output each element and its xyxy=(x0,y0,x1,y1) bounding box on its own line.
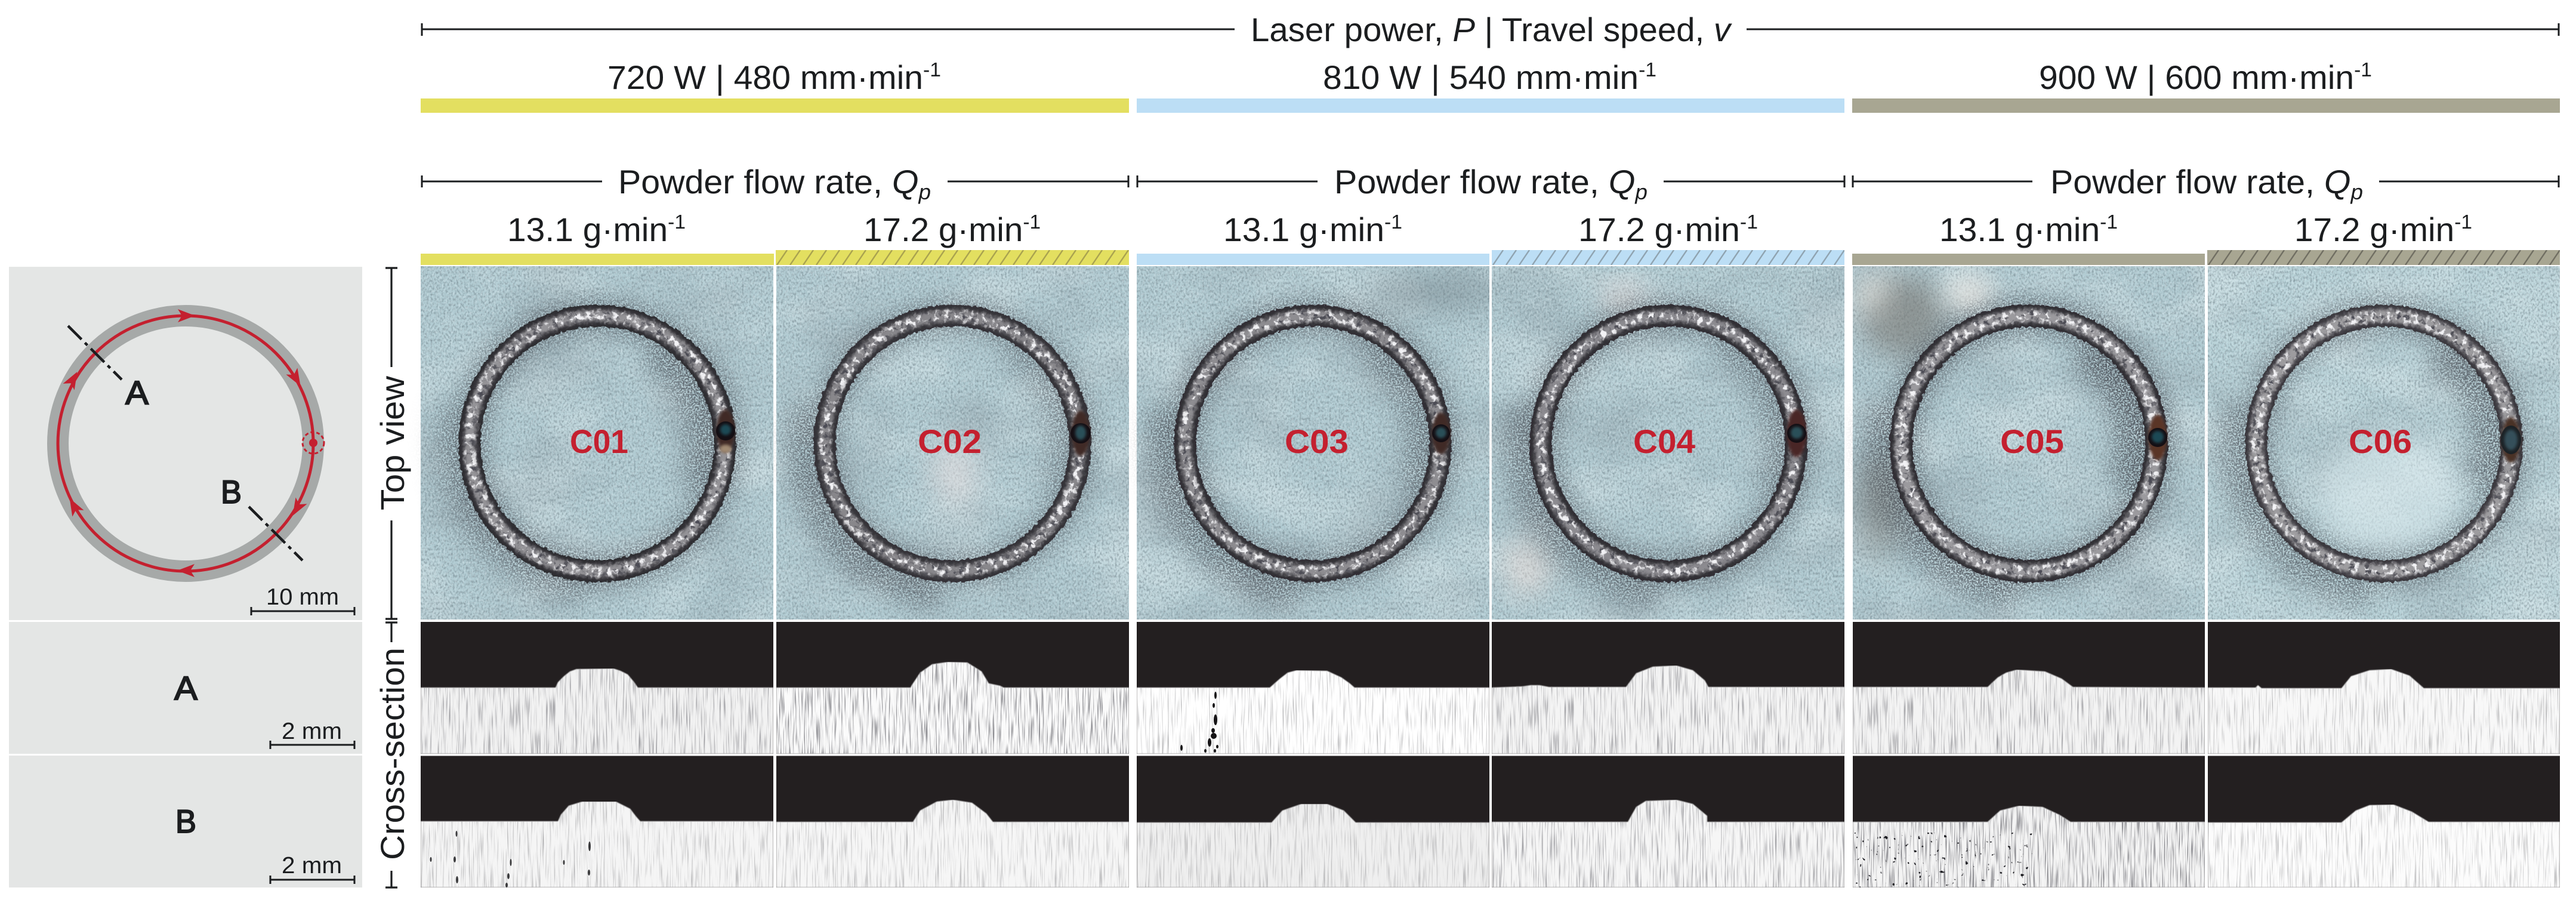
column header C01 xyxy=(421,211,774,265)
group heading: 720 W: -1 xyxy=(923,58,941,81)
powder flow bracket 1: p xyxy=(918,180,931,204)
cross-section B C04 xyxy=(1492,756,1844,887)
group heading: 900 W xyxy=(1852,58,2560,113)
pits xyxy=(1180,692,1218,753)
pits xyxy=(1855,833,2034,887)
bead ring xyxy=(58,316,313,571)
soot xyxy=(1875,316,2157,597)
header bracket: laser power and travel speed xyxy=(422,11,2559,48)
sample label: C03 xyxy=(1285,423,1349,460)
cross-section A C04 xyxy=(1492,622,1844,754)
powder flow bracket 3 xyxy=(1853,163,2559,204)
scale bar 2 mm xyxy=(270,853,354,884)
scale bar 10 mm xyxy=(251,584,354,615)
column header C01: 13.1 g·min xyxy=(507,211,665,248)
dark smudge xyxy=(1366,275,1498,310)
scale bar 2 mm: 2 mm xyxy=(282,853,342,879)
soot xyxy=(798,316,1080,597)
cross-section A C01 xyxy=(421,622,773,754)
overlap stud xyxy=(1432,412,1450,454)
sample label: C05 xyxy=(2000,423,2064,460)
overlap stud xyxy=(1070,411,1091,456)
pits xyxy=(430,831,591,887)
vertical axis: top view: Top view xyxy=(374,375,411,510)
column header C02: -1 xyxy=(1023,211,1041,233)
panel: C02 top view xyxy=(776,266,1129,620)
weld ring xyxy=(2256,316,2512,571)
panel: section A xyxy=(9,622,362,754)
group heading: 810 W: 810 W | 540 mm·min xyxy=(1323,58,1633,96)
cross-section B C06 xyxy=(2208,756,2560,887)
powder flow bracket 2: p xyxy=(1634,180,1648,204)
weld ring xyxy=(470,316,725,571)
heading B: B xyxy=(175,803,196,840)
overlap stud xyxy=(2501,417,2521,463)
discolouration patches xyxy=(1856,275,1993,561)
pale patches xyxy=(1504,286,1644,597)
weld ring xyxy=(1185,316,1440,571)
powder flow bracket 2: Powder flow rate, Q xyxy=(1334,163,1634,201)
column header C03: 13.1 g·min xyxy=(1223,211,1381,248)
weld ring xyxy=(1901,316,2157,571)
vertical axis: top view xyxy=(374,268,411,619)
column header C05: -1 xyxy=(2100,211,2118,233)
column header C02: 17.2 g·min xyxy=(863,211,1022,248)
scale bar 10 mm: 10 mm xyxy=(266,584,339,610)
group heading: 810 W xyxy=(1137,58,1844,113)
group heading: 900 W: 900 W | 600 mm·min xyxy=(2039,58,2349,96)
pale patch xyxy=(931,439,979,504)
laser path xyxy=(58,316,313,571)
cross-section B C02 xyxy=(776,756,1129,887)
overlap stud xyxy=(1787,409,1806,457)
cross-section A C05 xyxy=(1853,622,2205,754)
cross-section A C03 xyxy=(1137,622,1489,754)
powder flow bracket 3: p xyxy=(2350,180,2363,204)
panel: path schematic xyxy=(9,267,362,620)
powder flow bracket 3: Powder flow rate, Q xyxy=(2050,163,2350,201)
column header C04: -1 xyxy=(1740,211,1758,233)
cross-section B C03 xyxy=(1137,756,1489,887)
label B: B xyxy=(221,473,242,510)
panel: C03 top view xyxy=(1137,266,1498,620)
group heading: 720 W: 720 W | 480 mm·min xyxy=(607,58,917,96)
vertical axis: cross-section: Cross-section xyxy=(374,648,411,860)
panel: C04 top view xyxy=(1492,266,1844,620)
overlap stud xyxy=(2148,415,2167,460)
cross-section B C01 xyxy=(421,756,773,887)
panel: section B xyxy=(9,756,362,887)
cross-section A C02 xyxy=(776,622,1129,754)
group heading: 720 W xyxy=(421,58,1129,113)
overlap stud xyxy=(716,409,735,453)
group heading: 810 W: -1 xyxy=(1639,58,1656,81)
path arrows xyxy=(63,309,307,577)
powder flow bracket 2 xyxy=(1137,163,1844,204)
soot xyxy=(443,316,725,597)
panel: C06 top view xyxy=(2208,266,2560,620)
sample label: C06 xyxy=(2349,423,2412,460)
heading A: A xyxy=(174,669,198,707)
sample label: C02 xyxy=(918,423,982,460)
column header C05 xyxy=(1852,211,2205,265)
pale centre xyxy=(2315,436,2458,555)
powder flow bracket 1 xyxy=(422,163,1128,204)
soot xyxy=(1159,316,1440,597)
panel: C05 top view xyxy=(1853,266,2205,620)
column header C03 xyxy=(1137,211,1489,265)
soot xyxy=(2230,316,2512,597)
soot xyxy=(1514,316,1796,597)
column header C02 xyxy=(776,211,1129,265)
scale bar 2 mm: 2 mm xyxy=(282,719,342,744)
column header C06 xyxy=(2207,211,2560,265)
column header C06: -1 xyxy=(2454,211,2472,233)
header bracket: laser power and travel speed: Laser power, P | Travel speed, v xyxy=(1251,11,1732,48)
weld ring xyxy=(825,316,1080,571)
start point marker xyxy=(303,432,324,454)
column header C04: 17.2 g·min xyxy=(1578,211,1736,248)
scale bar 2 mm xyxy=(270,719,354,749)
column header C04 xyxy=(1492,211,1844,265)
section line A xyxy=(68,326,122,380)
weld ring xyxy=(1541,316,1796,571)
cross-section B C05 xyxy=(1853,756,2205,887)
column header C05: 13.1 g·min xyxy=(1939,211,2097,248)
powder flow bracket 1: Powder flow rate, Q xyxy=(618,163,918,201)
column header C03: -1 xyxy=(1384,211,1402,233)
section line B xyxy=(249,507,303,560)
label A: A xyxy=(125,374,149,411)
panel: C01 top view xyxy=(421,266,773,620)
cross-section A C06 xyxy=(2208,622,2560,754)
group heading: 900 W: -1 xyxy=(2354,58,2372,81)
column header C01: -1 xyxy=(668,211,686,233)
sample label: C01 xyxy=(570,423,628,460)
sample label: C04 xyxy=(1633,423,1695,460)
column header C06: 17.2 g·min xyxy=(2294,211,2452,248)
